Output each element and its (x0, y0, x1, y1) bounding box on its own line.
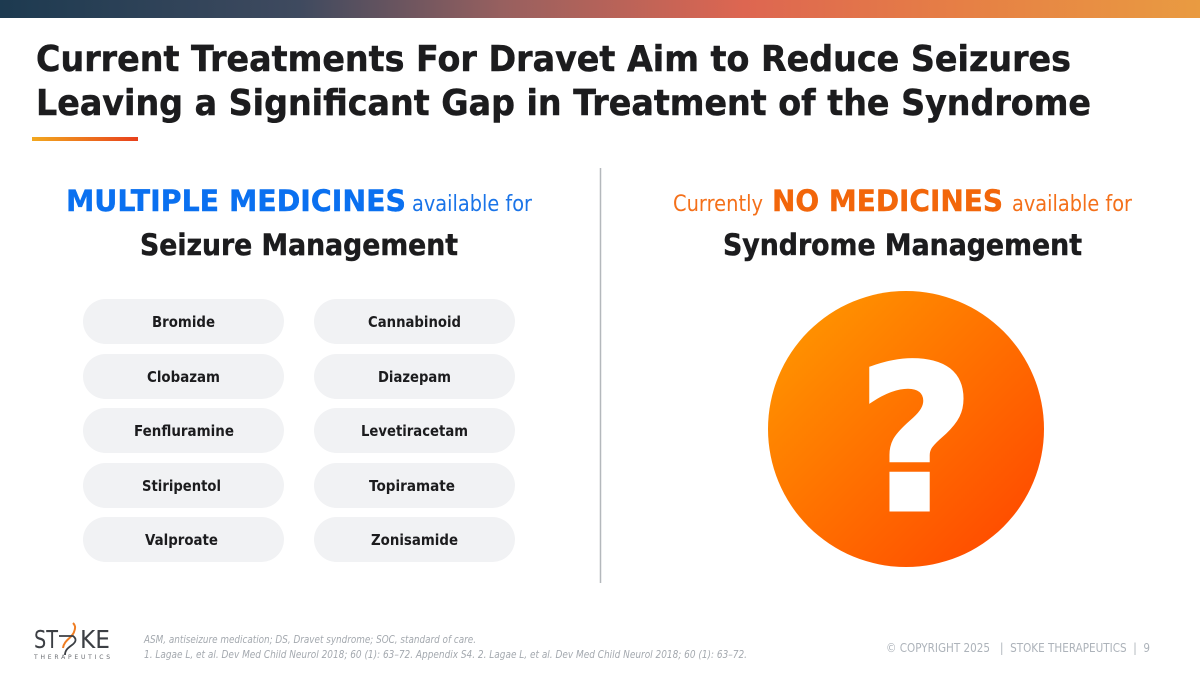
right heading: Currently (673, 192, 763, 217)
panel: seizure management (66, 184, 533, 562)
left heading: Seizure Management (140, 228, 458, 262)
pill: Clobazam (83, 354, 284, 399)
title: Leaving a Significant Gap in Treatment of the Syndrome (36, 83, 1091, 124)
right heading (673, 184, 1133, 262)
pill: Stiripentol (83, 463, 284, 508)
title accent bar (32, 137, 138, 141)
logo: Stoke Therapeutics (33, 623, 110, 661)
pill: Zonisamide: Zonisamide (371, 531, 458, 549)
left heading: MULTIPLE MEDICINES (66, 184, 406, 218)
left heading: available for (412, 192, 533, 217)
pill: Levetiracetam: Levetiracetam (361, 422, 468, 440)
pill: Topiramate (314, 463, 515, 508)
logo: Stoke Therapeutics: ST (34, 625, 59, 654)
icon: question mark circle (768, 291, 1044, 567)
pill: Levetiracetam (314, 408, 515, 453)
pill: Fenfluramine (83, 408, 284, 453)
panel: syndrome management (673, 184, 1133, 567)
logo: Stoke Therapeutics: THERAPEUTICS (33, 654, 110, 661)
pill: Fenfluramine: Fenfluramine (134, 422, 234, 440)
right heading: Syndrome Management (723, 228, 1082, 262)
pill: Cannabinoid: Cannabinoid (368, 313, 461, 331)
footnotes: 1. Lagae L, et al. Dev Med Child Neurol 2018; 60 (1): 63–72. Appendix S4. 2. Lagae L, et al. Dev Med Child Neurol 2018; 60 (1): 63–72. (144, 649, 747, 661)
pill: Diazepam: Diazepam (378, 368, 451, 386)
title (36, 39, 1091, 124)
pill: Cannabinoid (314, 299, 515, 344)
medicine pills (83, 299, 515, 562)
pill: Stiripentol: Stiripentol (142, 477, 221, 495)
pill: Bromide (83, 299, 284, 344)
title: Current Treatments For Dravet Aim to Reduce Seizures (36, 39, 1071, 80)
pill: Diazepam (314, 354, 515, 399)
pill: Topiramate: Topiramate (369, 477, 455, 495)
pill: Zonisamide (314, 517, 515, 562)
right heading: NO MEDICINES (772, 184, 1003, 218)
pill: Clobazam: Clobazam (147, 368, 220, 386)
top gradient band (0, 0, 1200, 18)
pill: Valproate: Valproate (145, 531, 218, 549)
icon: question mark circle: ? (858, 324, 974, 557)
copyright and page number: © COPYRIGHT 2025 | STOKE THERAPEUTICS | 9 (886, 640, 1150, 655)
pill: Bromide: Bromide (152, 313, 215, 331)
right heading: available for (1012, 192, 1133, 217)
pill: Valproate (83, 517, 284, 562)
logo: Stoke Therapeutics: KE (80, 625, 110, 654)
left heading (66, 184, 533, 262)
footnotes (143, 634, 747, 661)
footnotes: ASM, antiseizure medication; DS, Dravet syndrome; SOC, standard of care. (143, 634, 476, 646)
